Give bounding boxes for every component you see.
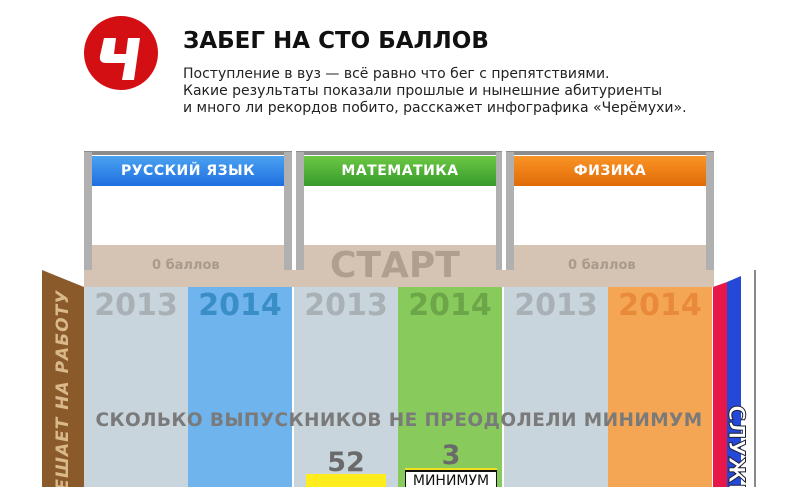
text: 2014 (198, 288, 282, 323)
text: 2014 (618, 288, 702, 323)
value 3: 3 (442, 440, 460, 471)
lanes (84, 287, 712, 487)
subtitle: и много ли рекордов побито, расскажет инфографика «Черёмухи». (183, 100, 687, 116)
title: ЗАБЕГ НА СТО БАЛЛОВ (183, 28, 489, 54)
failed minimum heading: СКОЛЬКО ВЫПУСКНИКОВ НЕ ПРЕОДОЛЕЛИ МИНИМУМ (95, 410, 703, 431)
start labels: 0 баллов (152, 258, 220, 273)
minimum label (405, 470, 497, 487)
start band (84, 245, 714, 287)
tab: math: МАТЕМАТИКА (341, 163, 459, 179)
start labels: 0 баллов (568, 258, 636, 273)
start labels (152, 245, 636, 286)
logo (84, 16, 158, 90)
tab: russian: РУССКИЙ ЯЗЫК (121, 163, 255, 179)
tab: russian (92, 156, 284, 186)
start labels: СТАРТ (330, 245, 460, 286)
text: 2013 (94, 288, 178, 323)
subtitle: Поступление в вуз — всё равно что бег с препятствиями. (183, 66, 610, 82)
value 52: 52 (327, 447, 365, 478)
subtitle (183, 66, 687, 116)
subtitle: Какие результаты показали прошлые и нынешние абитуриенты (183, 83, 662, 99)
right ribbon (713, 270, 756, 487)
text: 2013 (514, 288, 598, 323)
tab: math (304, 156, 496, 186)
text: 2014 (408, 288, 492, 323)
top frame (84, 151, 714, 155)
bar 52 (306, 474, 386, 487)
left ribbon (42, 270, 84, 487)
text: 2013 (304, 288, 388, 323)
years (94, 288, 702, 323)
tab: physics: ФИЗИКА (574, 163, 646, 179)
tab: physics (514, 156, 706, 186)
posts (84, 151, 714, 270)
